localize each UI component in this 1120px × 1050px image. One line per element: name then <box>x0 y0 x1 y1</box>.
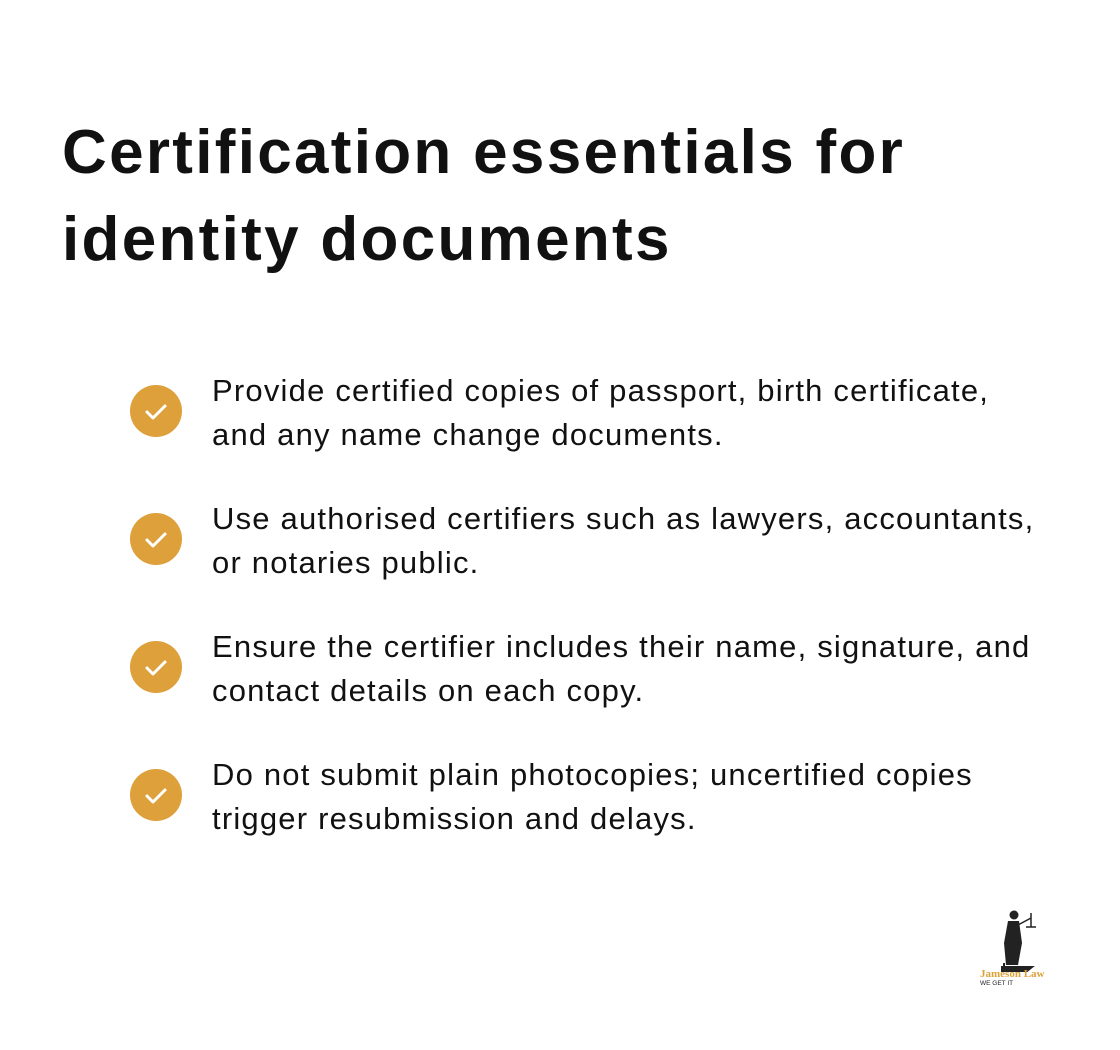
text <box>212 501 1034 580</box>
text: Do not submit plain photocopies; uncertified copies <box>212 757 973 792</box>
text: trigger resubmission and delays. <box>212 801 697 836</box>
item 3 <box>130 629 1030 708</box>
text <box>212 629 1030 708</box>
item 2 <box>130 501 1034 580</box>
icon: check <box>130 641 182 693</box>
icon: check <box>130 513 182 565</box>
item 4 <box>130 757 973 836</box>
text: contact details on each copy. <box>212 673 644 708</box>
text: Provide certified copies of passport, birth certificate, <box>212 373 989 408</box>
icon: check <box>130 385 182 437</box>
title <box>62 118 905 274</box>
text: Ensure the certifier includes their name, signature, and <box>212 629 1030 664</box>
text: or notaries public. <box>212 545 480 580</box>
text <box>212 373 989 452</box>
title: Certification essentials for <box>62 118 905 187</box>
text <box>212 757 973 836</box>
item 1 <box>130 373 989 452</box>
text: and any name change documents. <box>212 417 724 452</box>
logo <box>980 910 1045 987</box>
title: identity documents <box>62 205 672 274</box>
icon: check <box>130 769 182 821</box>
logo: WE GET IT <box>980 980 1013 987</box>
text: Use authorised certifiers such as lawyers, accountants, <box>212 501 1034 536</box>
logo: Jameson Law <box>980 968 1045 980</box>
